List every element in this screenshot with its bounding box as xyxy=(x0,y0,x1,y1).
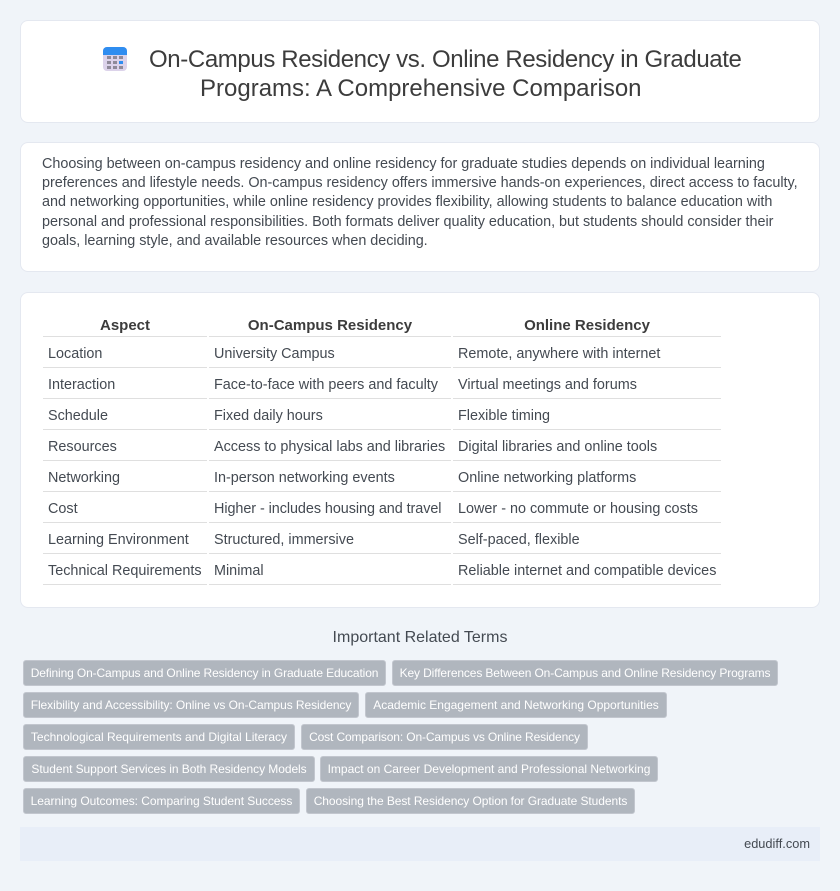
icon: calendar xyxy=(103,47,127,71)
comparison table: Reliable internet and compatible devices xyxy=(458,563,716,579)
comparison table: Online Residency xyxy=(524,317,650,334)
comparison table: Structured, immersive xyxy=(214,532,354,548)
comparison table: Virtual meetings and forums xyxy=(458,377,637,393)
comparison table: Location xyxy=(48,346,102,362)
title xyxy=(149,46,742,102)
related term chips: Technological Requirements and Digital Literacy xyxy=(31,730,287,744)
text block: introduction: and networking opportunities, while online residency provides flexibility, allowing students to balance education with xyxy=(42,194,772,210)
related term chips: Choosing the Best Residency Option for Graduate Students xyxy=(314,794,627,808)
comparison table: Learning Environment xyxy=(48,532,189,548)
comparison table: Digital libraries and online tools xyxy=(458,439,657,455)
comparison table: Interaction xyxy=(48,377,115,393)
comparison table: Remote, anywhere with internet xyxy=(458,346,660,362)
title: On-Campus Residency vs. Online Residency in Graduate xyxy=(149,46,742,73)
text block: introduction: preferences and lifestyle needs. On-campus residency offers immersive hands-on experiences, direct access to faculty, xyxy=(42,175,798,191)
related term chips: Defining On-Campus and Online Residency in Graduate Education xyxy=(31,666,378,680)
footer: source xyxy=(20,827,820,861)
related term chips: Learning Outcomes: Comparing Student Success xyxy=(31,794,292,808)
comparison table: Lower - no commute or housing costs xyxy=(458,501,698,517)
source text: edudiff.com xyxy=(744,836,810,851)
related term chips xyxy=(23,660,778,814)
comparison table: Access to physical labs and libraries xyxy=(214,439,445,455)
comparison table: Self-paced, flexible xyxy=(458,532,580,548)
comparison table: On-Campus Residency xyxy=(248,317,412,334)
text block: introduction xyxy=(42,156,798,249)
comparison table: Aspect xyxy=(100,317,150,334)
title: Programs: A Comprehensive Comparison xyxy=(200,75,642,102)
comparison table: Higher - includes housing and travel xyxy=(214,501,441,517)
comparison table: In-person networking events xyxy=(214,470,395,486)
heading: related terms: Important Related Terms xyxy=(333,629,507,646)
text block: introduction: goals, learning style, and available resources when deciding. xyxy=(42,233,428,249)
comparison table: Resources xyxy=(48,439,117,455)
comparison table xyxy=(43,317,721,585)
comparison table: Online networking platforms xyxy=(458,470,636,486)
related term chips: Flexibility and Accessibility: Online vs On-Campus Residency xyxy=(31,698,351,712)
panel: introduction xyxy=(20,142,820,272)
comparison table: Networking xyxy=(48,470,120,486)
related term chips: Key Differences Between On-Campus and Online Residency Programs xyxy=(400,666,770,680)
panel: title card xyxy=(20,20,820,123)
comparison table: Schedule xyxy=(48,408,108,424)
comparison table: Flexible timing xyxy=(458,408,550,424)
comparison table: Technical Requirements xyxy=(48,563,202,579)
related term chips: Impact on Career Development and Professional Networking xyxy=(328,762,650,776)
text block: introduction: personal and professional responsibilities. Both formats deliver quality education, but students should consider their xyxy=(42,214,773,230)
comparison table: Fixed daily hours xyxy=(214,408,323,424)
related term chips: Academic Engagement and Networking Opportunities xyxy=(373,698,659,712)
panel: comparison table xyxy=(20,292,820,608)
comparison table: Minimal xyxy=(214,563,264,579)
comparison table: University Campus xyxy=(214,346,335,362)
comparison table: Cost xyxy=(48,501,78,517)
related term chips: Cost Comparison: On-Campus vs Online Residency xyxy=(309,730,580,744)
related term chips: Student Support Services in Both Residency Models xyxy=(31,762,307,776)
comparison table: Face-to-face with peers and faculty xyxy=(214,377,438,393)
text block: introduction: Choosing between on-campus residency and online residency for graduate studies depends on individual learning xyxy=(42,156,765,172)
